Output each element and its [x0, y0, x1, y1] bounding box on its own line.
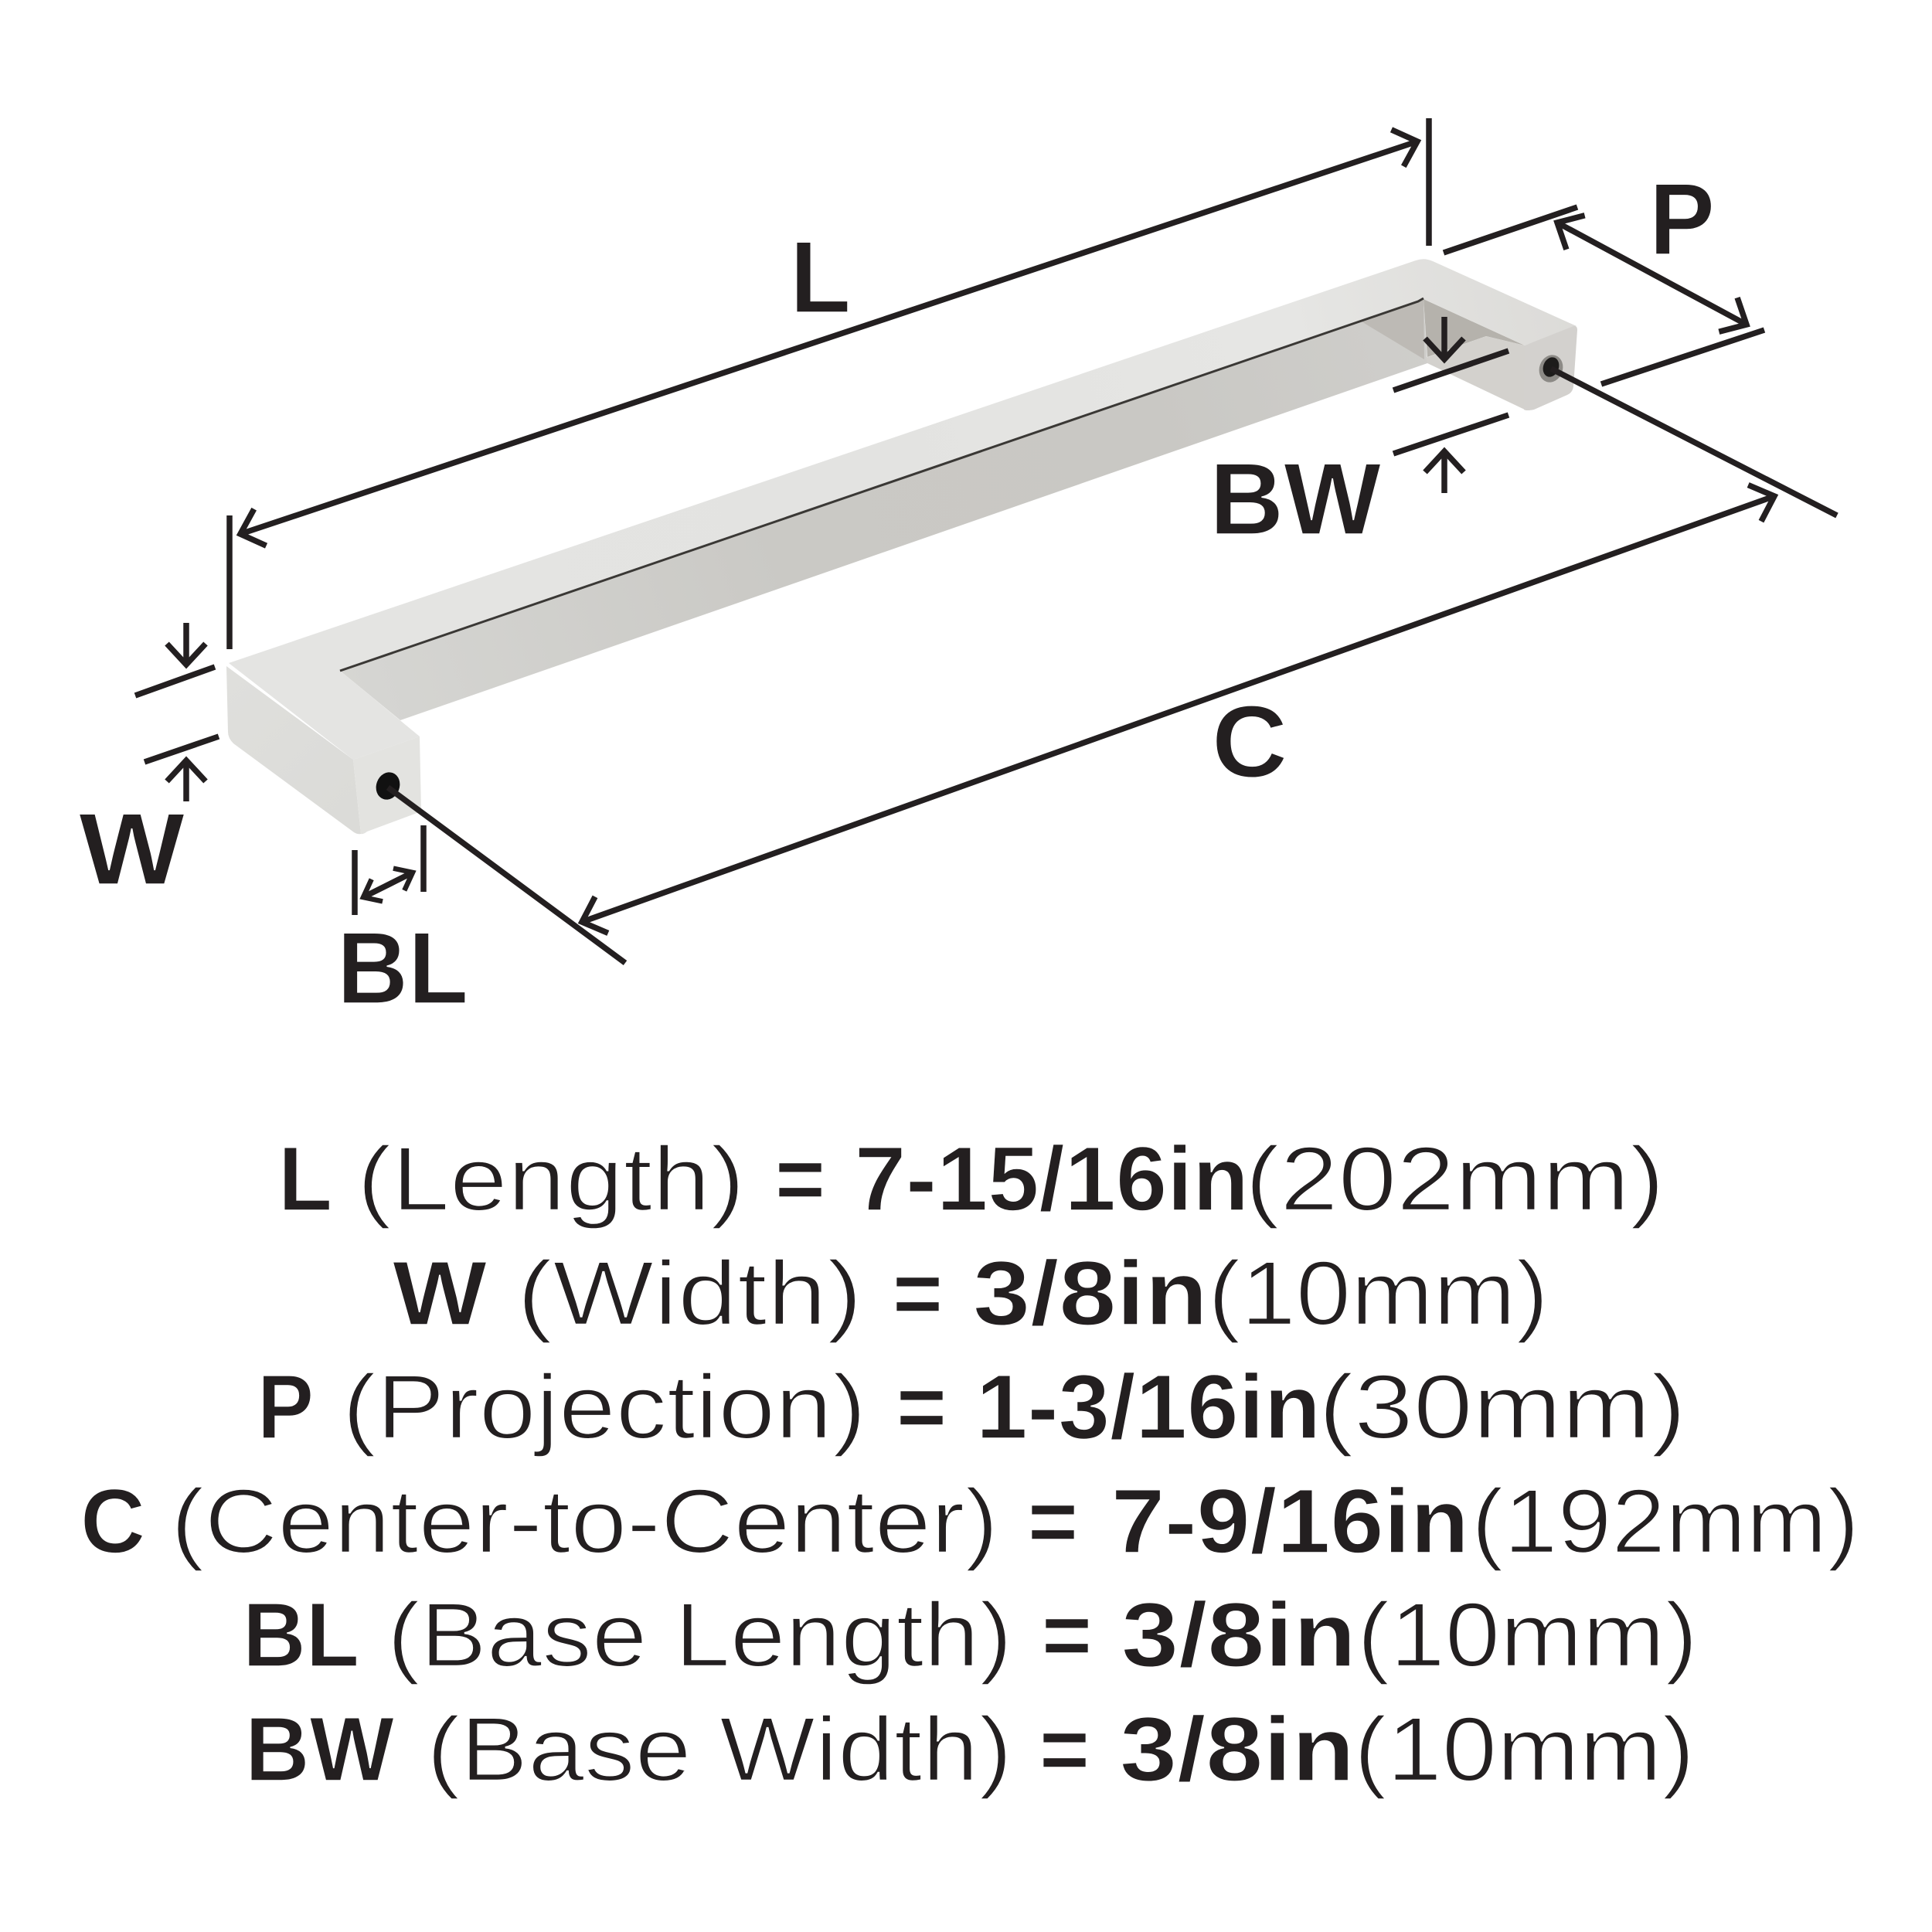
label L: L	[790, 220, 851, 334]
label BL: BL	[337, 911, 468, 1025]
spec: projection: 1-3/16in	[976, 1356, 1321, 1458]
C dimension arrow	[582, 496, 1774, 922]
label C: C	[1212, 685, 1287, 798]
P dimension arrow	[1557, 223, 1747, 325]
spec: center-to-center: (192mm)	[1471, 1471, 1859, 1573]
handle inner corner shadow	[1360, 299, 1424, 359]
screw hole right	[1536, 352, 1566, 386]
spec: center-to-center	[80, 1471, 1859, 1573]
spec: projection: P	[257, 1356, 314, 1458]
spec: projection: =	[896, 1356, 947, 1458]
L right extension line	[1426, 118, 1432, 246]
spec: base length: (10mm)	[1357, 1584, 1698, 1686]
BL right line	[420, 825, 427, 892]
spec: length: (Length)	[357, 1128, 745, 1230]
handle inner bar face	[340, 299, 1427, 720]
spec: length: =	[775, 1128, 825, 1230]
spec: base length: =	[1042, 1584, 1092, 1686]
spec: length	[278, 1128, 1665, 1230]
spec: projection: (30mm)	[1318, 1356, 1686, 1458]
label P: P	[1649, 162, 1715, 276]
spec: width: (Width)	[517, 1243, 862, 1345]
W up arrow	[183, 760, 189, 801]
BW upper line	[1393, 351, 1509, 390]
spec: projection	[257, 1356, 1686, 1458]
handle shiny inner edge	[340, 298, 1423, 671]
BW lower line	[1393, 415, 1509, 454]
handle left end face	[353, 736, 421, 834]
spec: length: L	[278, 1128, 332, 1230]
spec: width: (10mm)	[1208, 1243, 1549, 1345]
spec: projection: (Projection)	[342, 1356, 866, 1458]
spec: base width	[245, 1699, 1695, 1801]
label BW: BW	[1209, 442, 1381, 556]
L dimension arrow	[240, 141, 1417, 534]
BL double arrow	[363, 872, 413, 897]
spec: base width: BW	[245, 1699, 395, 1801]
spec: width: W	[393, 1243, 488, 1345]
label W: W	[79, 792, 185, 906]
spec: base width: =	[1039, 1699, 1090, 1801]
spec: center-to-center: (Center-to-Center)	[171, 1471, 998, 1573]
BW up arrow	[1441, 451, 1447, 493]
spec: center-to-center: C	[80, 1471, 145, 1573]
spec: base length: BL	[243, 1584, 359, 1686]
C left extension line	[388, 787, 625, 963]
handle left leg side face	[226, 666, 361, 834]
C right extension line	[1551, 369, 1837, 515]
dimension lines and arrows	[135, 118, 1837, 963]
spec: width: =	[893, 1243, 943, 1345]
spec: length: 7-15/16in	[855, 1128, 1249, 1230]
spec: width: 3/8in	[973, 1243, 1208, 1345]
handle right leg dark reflection	[1423, 299, 1525, 357]
spec: base length: 3/8in	[1121, 1584, 1356, 1686]
spec list	[80, 1128, 1859, 1801]
spec: base width: (10mm)	[1354, 1699, 1695, 1801]
BW down arrow	[1441, 317, 1447, 359]
P top extension line	[1444, 207, 1577, 253]
product: cabinet pull handle	[226, 259, 1577, 834]
spec: width	[393, 1243, 1549, 1345]
W upper line	[135, 667, 215, 696]
W down arrow	[183, 623, 189, 665]
spec: base length	[243, 1584, 1698, 1686]
W lower line	[145, 736, 219, 762]
screw hole left	[372, 769, 403, 803]
handle right leg side face	[1426, 336, 1525, 410]
spec: base width: 3/8in	[1120, 1699, 1355, 1801]
handle top face	[229, 259, 1577, 760]
L left extension line	[226, 515, 233, 649]
spec: center-to-center: =	[1028, 1471, 1078, 1573]
handle right end face	[1524, 326, 1577, 410]
spec: base width: (Base Width)	[427, 1699, 1012, 1801]
P bottom extension line	[1601, 330, 1764, 384]
spec: base length: (Base Length)	[387, 1584, 1012, 1686]
spec: length: (202mm)	[1245, 1128, 1665, 1230]
spec: center-to-center: 7-9/16in	[1111, 1471, 1469, 1573]
BL left line	[352, 850, 358, 915]
